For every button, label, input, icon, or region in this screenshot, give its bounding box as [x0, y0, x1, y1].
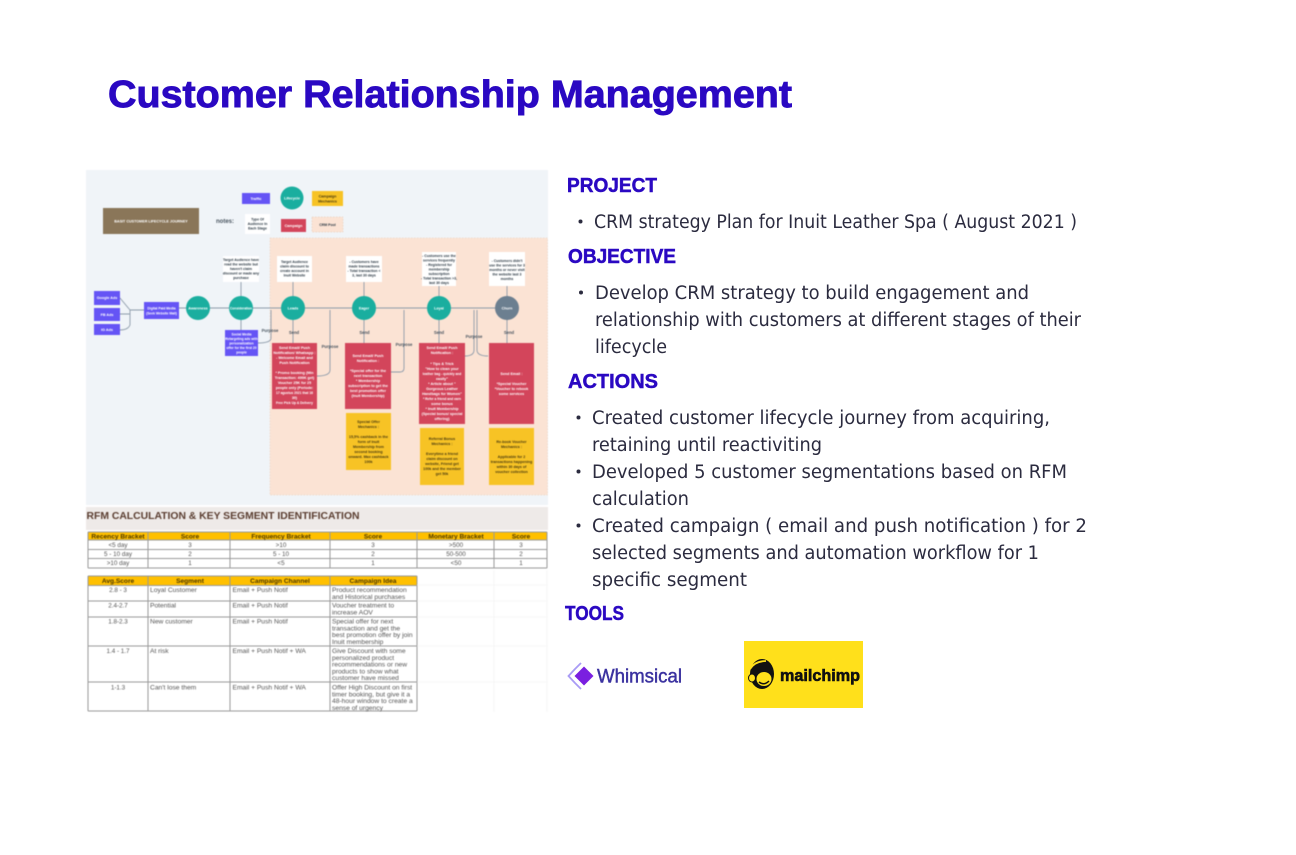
- RFM score table: >10 day: [107, 560, 130, 567]
- campaign boxes: (Inuit Membership): [352, 394, 385, 398]
- mechanics boxes: Applicable for 2: [498, 455, 525, 459]
- connectors: Purpose: [322, 344, 339, 349]
- traffic source boxes: (Seek Website Mall): [146, 312, 177, 316]
- campaign boxes: Send Email/ Push: [353, 354, 384, 358]
- legend: Mechanics: [318, 200, 337, 204]
- RFM score table: 5 - 10 day: [104, 551, 133, 558]
- section: project: CRM strategy Plan for Inuit Leather Spa ( August 2021 ): [594, 212, 1077, 233]
- traffic source boxes: IG Ads: [101, 328, 113, 332]
- segment campaign table: [88, 570, 547, 712]
- mechanics boxes: website, Friend get: [424, 462, 459, 466]
- segment campaign table: Campaign Channel: [250, 578, 310, 585]
- campaign boxes: some services: [499, 392, 524, 396]
- segment campaign table: Email + Push Notif + WA: [232, 648, 306, 655]
- segment campaign table: Email + Push Notif: [232, 618, 288, 626]
- traffic source boxes: people: [236, 350, 247, 354]
- connectors: Send: [504, 330, 515, 335]
- legend: Traffic: [250, 197, 262, 201]
- audience note boxes: - Total transaction <: [347, 269, 381, 273]
- logo: Whimsical: [568, 663, 682, 689]
- RFM score table: Recency Bracket: [91, 534, 145, 540]
- RFM score table: 3: [188, 542, 192, 549]
- audience note boxes: - Customers didn't: [492, 259, 523, 263]
- RFM score table: <50: [451, 560, 462, 567]
- lifecycle stage circles: [186, 296, 519, 320]
- section: actions: specific segment: [592, 570, 747, 591]
- connectors: Purpose: [466, 334, 483, 339]
- legend: Audience In: [248, 222, 267, 226]
- RFM score table: 3: [519, 542, 523, 549]
- legend: Campaign: [285, 224, 303, 228]
- RFM score table: 2: [371, 551, 375, 558]
- segment campaign table: timer booking, but give it a: [332, 691, 410, 698]
- segment campaign table: 1-1.3: [111, 684, 126, 692]
- campaign boxes: * Refer a friend and earn: [423, 397, 461, 401]
- section: actions: Created customer lifecycle journey from acquiring,: [592, 408, 1050, 429]
- section: objective: lifecycle: [595, 337, 667, 358]
- segment campaign table: Voucher treatment to: [332, 602, 394, 610]
- mechanics boxes: Mechanics :: [431, 442, 453, 446]
- segment campaign table: 2.8 - 3: [109, 587, 127, 594]
- campaign boxes: Free Pick Up & Delivery: [276, 401, 313, 405]
- campaign boxes: 30): [292, 396, 298, 400]
- segment campaign table: products to show what: [332, 668, 399, 675]
- mechanics boxes: Referral Bonus: [429, 437, 455, 441]
- audience note boxes: use the services for 3: [489, 264, 525, 268]
- section: project: PROJECT: [567, 175, 657, 197]
- segment campaign table: personalized product: [332, 655, 394, 662]
- section: actions: ACTIONS: [568, 371, 658, 393]
- panel: customer lifecycle journey diagram: [86, 170, 548, 505]
- mechanics boxes: Re-book Voucher: [496, 440, 527, 444]
- audience note boxes: Target Audience have: [223, 258, 259, 262]
- section: objective: OBJECTIVE: [568, 246, 676, 268]
- audience note boxes: create account in: [280, 269, 309, 273]
- segment campaign table: Email + Push Notif: [232, 587, 288, 594]
- campaign boxes: *Special Voucher: [497, 382, 527, 386]
- RFM score table: 3: [371, 542, 375, 549]
- lifecycle stage circles: Eager: [359, 306, 370, 310]
- section: actions: calculation: [592, 489, 689, 510]
- audience note boxes: purchase: [233, 276, 249, 280]
- logo: Whimsical: Whimsical: [597, 666, 682, 688]
- segment campaign table: transaction and get the: [332, 625, 400, 632]
- mechanics boxes: claim discount on: [426, 457, 458, 461]
- RFM score table: 1: [188, 560, 192, 567]
- campaign boxes: [272, 343, 534, 424]
- audience note boxes: Inuit Website: [284, 274, 305, 278]
- diagram title box: [103, 208, 199, 234]
- mechanics boxes: Mechanics :: [501, 445, 522, 449]
- legend: Lifecycle: [284, 196, 300, 200]
- campaign boxes: * Inuit Membership: [426, 407, 459, 411]
- legend: CRM Pool: [319, 223, 336, 227]
- RFM score table: Monetary Bracket: [428, 534, 484, 540]
- segment campaign table: Avg.Score: [102, 578, 135, 585]
- segment campaign table: and Historical purchases: [332, 594, 406, 601]
- logo: Mailchimp: mailchimp: [780, 666, 860, 685]
- traffic source boxes: Google Ads: [97, 296, 117, 300]
- campaign boxes: * Membership: [356, 379, 381, 383]
- RFM score table: <5 day: [108, 542, 128, 549]
- legend: notes:: [216, 219, 234, 225]
- traffic source boxes: Retargeting ads with: [225, 337, 258, 341]
- RFM score table: 1: [519, 560, 523, 567]
- traffic source boxes: FB Ads: [101, 313, 113, 317]
- segment campaign table: Inuit membership: [332, 639, 384, 646]
- campaign boxes: subscription to get the: [348, 384, 388, 388]
- mechanics boxes: Everytime a friend: [426, 452, 459, 456]
- campaign boxes: * Article about ": [428, 382, 456, 386]
- traffic source boxes: offer for the first 20: [226, 346, 257, 350]
- legend: Each Stage: [248, 226, 267, 230]
- campaign boxes: *Voucher to rebook: [495, 387, 529, 391]
- campaign boxes: Send Email/ Push: [427, 346, 458, 350]
- audience note boxes: read the website but: [224, 262, 259, 266]
- campaign boxes: offering): [435, 417, 450, 421]
- legend: Campaign: [319, 194, 337, 198]
- section: objective: relationship with customers at different stages of their: [595, 310, 1081, 331]
- segment campaign table: customer have missed: [332, 675, 399, 682]
- connectors: Send: [289, 330, 300, 335]
- lifecycle stage circles: Awareness: [188, 306, 208, 310]
- audience note boxes: services frequently: [423, 258, 455, 262]
- campaign boxes: Transaction: 499K get): [275, 376, 315, 380]
- connectors: Purpose: [396, 342, 413, 347]
- RFM score table: 5 - 10: [273, 551, 290, 558]
- traffic source boxes: Digital Paid Media: [147, 306, 176, 310]
- segment campaign table: Offer High Discount on first: [332, 684, 412, 692]
- diagram title box: BASIT CUSTOMER LIFECYCLE JOURNEY: [114, 220, 188, 224]
- section: actions: selected segments and automation workflow for 1: [592, 543, 1039, 564]
- section: tools heading: TOOLS: [565, 603, 624, 625]
- audience note boxes: membership: [429, 268, 449, 272]
- connectors: Purpose: [262, 328, 279, 333]
- audience note boxes: 3, last 30 days: [352, 274, 376, 278]
- campaign boxes: * Tips & Trick: [430, 362, 455, 366]
- legend: Type Of: [251, 218, 265, 222]
- RFM score table: 2: [188, 551, 192, 558]
- segment campaign table: recommendations or new: [332, 662, 407, 669]
- audience note boxes: months: [501, 277, 513, 281]
- mechanics boxes: onward. Max cashback: [348, 455, 390, 459]
- segment campaign table: Campaign Idea: [350, 578, 397, 585]
- traffic source boxes: Social Media: [232, 332, 252, 336]
- campaign boxes: Notification/ Whatsapp :: [273, 351, 316, 355]
- mechanics boxes: transactions happening: [491, 460, 532, 464]
- campaign boxes: Gorgeous Leather: [426, 387, 458, 391]
- segment campaign table: Email + Push Notif: [232, 602, 288, 610]
- mechanics boxes: 100k: [364, 460, 374, 464]
- campaign boxes: Notification :: [357, 359, 379, 363]
- section: actions: Created campaign ( email and push notification ) for 2: [592, 516, 1087, 537]
- title: Customer Relationship Management: [108, 74, 792, 116]
- RFM score table: >10: [276, 542, 287, 549]
- mechanics boxes: 15,5% cashback in the: [349, 435, 388, 439]
- legend: [216, 186, 343, 234]
- campaign boxes: next transaction: [354, 374, 383, 378]
- mechanics boxes: Membership from: [353, 445, 385, 449]
- audience note boxes: haven't claim: [230, 267, 252, 271]
- segment campaign table: New customer: [150, 618, 194, 626]
- mechanics boxes: within 30 days of: [496, 465, 527, 469]
- campaign boxes: Send Email/ Push: [279, 346, 311, 350]
- segment campaign table: Segment: [176, 578, 205, 585]
- section: objective: Develop CRM strategy to build engagement and: [595, 283, 1029, 304]
- RFM score table: Score: [364, 534, 382, 540]
- audience note boxes: - Total transaction >3,: [421, 276, 457, 280]
- audience note boxes: - Registered for: [426, 263, 453, 267]
- mechanics boxes: Special Offer: [357, 420, 380, 424]
- audience note boxes: - Customers use the: [422, 254, 456, 258]
- audience note boxes: discount or made any: [223, 272, 259, 276]
- campaign boxes: leather bag - quickly and: [423, 372, 461, 376]
- mechanics boxes: Mechanics :: [358, 425, 379, 429]
- segment campaign table: At risk: [150, 648, 169, 655]
- campaign boxes: some bonus: [431, 402, 453, 406]
- audience note boxes: last 30 days: [429, 281, 449, 285]
- mechanics boxes: form of Inuit: [358, 440, 380, 444]
- segment campaign table: Special offer for next: [332, 618, 393, 626]
- RFM score table: >500: [449, 542, 464, 549]
- segment campaign table: Potential: [150, 602, 177, 610]
- mechanics boxes: 100k and the member: [423, 467, 461, 471]
- section: actions: retaining until reactiviting: [592, 435, 822, 456]
- campaign boxes: (Special bonus/ special: [422, 412, 462, 416]
- campaign boxes: Handbags for Women": [422, 392, 462, 396]
- RFM score table: [88, 532, 547, 568]
- campaign boxes: easily": [436, 377, 448, 381]
- segment campaign table: sense of urgency: [332, 705, 384, 712]
- RFM score table: Score: [512, 534, 530, 540]
- section: actions: Developed 5 customer segmentations based on RFM: [592, 462, 1067, 483]
- lifecycle stage circles: Loyal: [434, 306, 444, 310]
- mechanics boxes: get 50k: [436, 472, 449, 476]
- segment campaign table: increase AOV: [332, 610, 373, 616]
- audience note boxes: subscription: [428, 272, 450, 276]
- RFM score table: 1: [371, 560, 375, 567]
- campaign boxes: "How to clean your: [425, 367, 459, 371]
- traffic source boxes: personalization: [229, 342, 254, 346]
- lifecycle stage circles: Churn: [502, 306, 513, 310]
- section: actions: [568, 371, 1087, 591]
- audience note boxes: months or never visit: [489, 268, 526, 272]
- campaign boxes: best promotion offer: [350, 389, 387, 393]
- campaign boxes: - Welcome Email and: [276, 356, 314, 360]
- campaign boxes: Notification :: [431, 351, 453, 355]
- segment campaign table: Product recommendation: [332, 587, 407, 594]
- segment campaign table: 1.4 - 1.7: [106, 648, 130, 655]
- audience note boxes: the website last 3: [493, 272, 522, 276]
- segment campaign table: Can't lose them: [150, 684, 197, 692]
- mechanics boxes: [346, 413, 534, 485]
- segment campaign table: Give Discount with some: [332, 648, 406, 655]
- panel: RFM calculation: [86, 507, 548, 712]
- campaign boxes: Send Email :: [500, 372, 523, 376]
- connectors: Send: [434, 330, 445, 335]
- campaign boxes: Push Notification: [279, 361, 310, 365]
- audience note boxes: [223, 252, 526, 286]
- campaign boxes: people only (Periode:: [276, 386, 313, 390]
- segment campaign table: 1.8-2.3: [108, 618, 128, 626]
- section: project: [567, 175, 1077, 233]
- logo: Mailchimp: [744, 641, 863, 708]
- campaign boxes: * Promo booking (Min: [275, 371, 314, 375]
- lifecycle stage circles: Leads: [288, 306, 298, 310]
- audience note boxes: made transactions: [349, 264, 380, 268]
- audience note boxes: claim discount to: [280, 264, 309, 268]
- segment campaign table: Email + Push Notif + WA: [232, 684, 306, 692]
- RFM score table: Frequency Bracket: [251, 534, 311, 540]
- campaign boxes: *Special offer for the: [350, 369, 386, 373]
- campaign boxes: 17 agustus 2021 that 16: [276, 391, 313, 395]
- mechanics boxes: second booking: [354, 450, 383, 454]
- segment campaign table: 2.4-2.7: [108, 602, 128, 610]
- campaign boxes: Voucher 25K for 25: [278, 381, 311, 385]
- lifecycle stage circles: Consideration: [230, 306, 252, 310]
- audience note boxes: Target Audience: [281, 260, 308, 264]
- RFM score table: <5: [277, 560, 285, 567]
- RFM heading: RFM CALCULATION & KEY SEGMENT IDENTIFICATION: [86, 510, 360, 522]
- segment campaign table: best promotion offer by join: [332, 632, 413, 639]
- audience note boxes: - Customers have: [349, 260, 379, 264]
- section: objective: [568, 246, 1081, 358]
- segment campaign table: 48-hour window to create a: [332, 698, 413, 705]
- connectors: Send: [359, 330, 370, 335]
- RFM score table: 50-500: [446, 551, 466, 558]
- traffic source boxes: [94, 291, 258, 356]
- RFM score table: 2: [519, 551, 523, 558]
- mechanics boxes: voucher collection: [495, 470, 529, 474]
- RFM score table: Score: [181, 534, 199, 540]
- connectors: [120, 282, 515, 376]
- segment campaign table: Loyal Customer: [150, 587, 198, 594]
